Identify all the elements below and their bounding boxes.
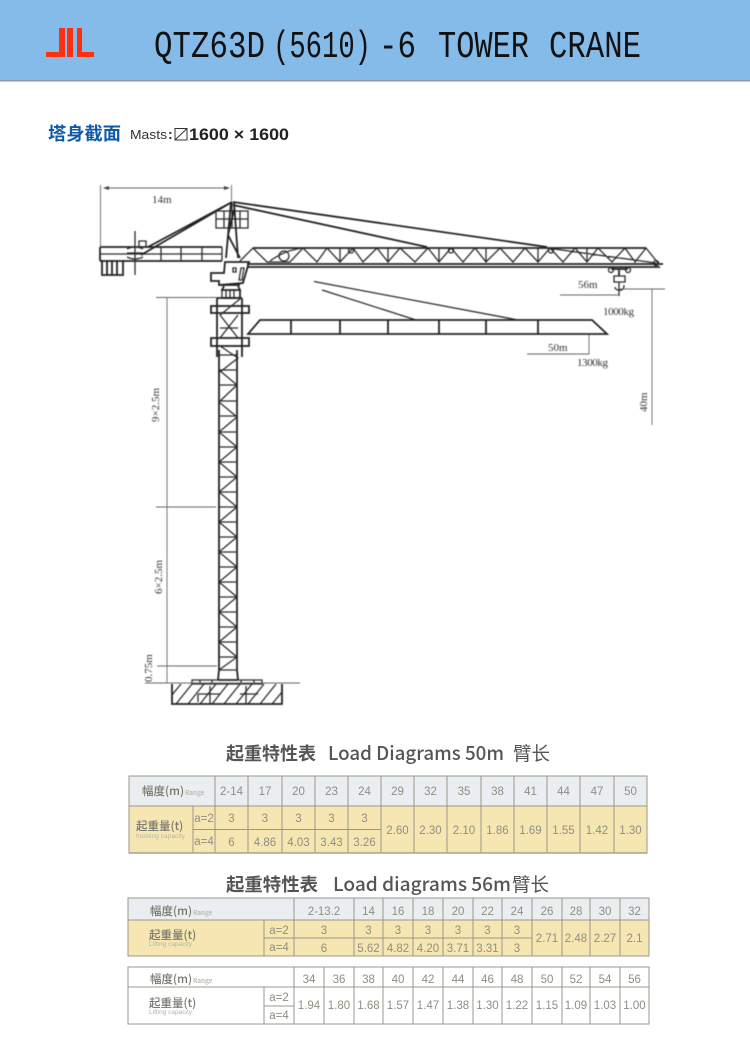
lower capacity values: 1.57 (387, 1000, 409, 1012)
upper capacity values: 3.31 (476, 943, 499, 955)
range values: 17 (259, 786, 271, 798)
row label: hoisting capacity: a=4 (194, 836, 214, 848)
range values: 38 (491, 786, 504, 798)
climbing frame (211, 298, 249, 372)
lower range values: 44 (452, 974, 465, 986)
range values: 32 (424, 786, 437, 798)
dimension: mast heights: 9×2.5m (150, 388, 162, 422)
upper capacity values: 2.1 (626, 933, 642, 945)
mast section heading: 塔身截面 (48, 120, 121, 146)
range values: 2-14 (220, 786, 244, 798)
upper range values: 18 (422, 906, 434, 918)
upper row labels (149, 903, 289, 954)
row label: hoisting capacity: hoisting capacity (136, 833, 186, 840)
upper capacity values: 3 (455, 925, 461, 937)
lower range values (303, 974, 641, 986)
counter jib (100, 231, 222, 275)
upper capacity values: 6 (321, 943, 327, 955)
mast lattice (218, 350, 238, 680)
capacity values: 3.43 (320, 837, 343, 849)
slewing unit and cab (211, 262, 249, 298)
upper row labels: Lifting capacity (149, 941, 193, 948)
lower range values: 34 (303, 974, 316, 986)
table: load diagram 56m jib (128, 898, 649, 1024)
upper range values: 30 (599, 906, 611, 918)
lower range values: 56 (628, 974, 641, 986)
upper capacity values: 3 (395, 925, 401, 937)
capacity values: 2.30 (419, 825, 442, 837)
upper capacity values: 5.62 (357, 943, 380, 955)
jib 50m variant (248, 282, 608, 369)
foundation (172, 680, 282, 704)
table title: 50m: 臂长 (513, 739, 550, 766)
lower range values: 48 (511, 974, 523, 986)
capacity values: 3 (295, 813, 302, 825)
dimension: 56m 1000kg: 1000kg (603, 306, 634, 318)
upper row labels: a=2 (269, 925, 289, 937)
upper range values (308, 906, 641, 918)
upper capacity values: 3 (514, 925, 520, 937)
upper range values: 32 (628, 906, 641, 918)
title: TOWER (438, 26, 529, 69)
capacity values: 1.30 (619, 825, 642, 837)
tower head and tie bars (141, 202, 547, 258)
main jib 56m (240, 248, 663, 267)
table title: 50m (226, 739, 550, 766)
row label: hoisting capacity: a=2 (194, 813, 214, 825)
upper capacity values: 3 (514, 943, 520, 955)
upper range values: 2-13.2 (308, 906, 340, 918)
range values: 50 (624, 786, 637, 798)
table title: 56m: 起重特性表 (226, 871, 318, 897)
capacity values: 2.10 (453, 825, 475, 837)
title: (5610) (273, 26, 371, 69)
mast section heading (48, 120, 289, 146)
capacity values: 1.42 (586, 825, 608, 837)
upper range values: 28 (570, 906, 582, 918)
lower row labels (149, 971, 289, 1022)
range values: 29 (391, 786, 404, 798)
lower capacity values: 1.03 (594, 1000, 616, 1012)
title (154, 26, 641, 69)
table title: 56m: Load diagrams 56m (333, 870, 511, 897)
capacity values: 4.03 (287, 837, 310, 849)
upper range values: 22 (481, 906, 494, 918)
range values (220, 786, 637, 798)
lower capacity values: 1.30 (476, 1000, 499, 1012)
range values: 24 (358, 786, 371, 798)
capacity values: 1.55 (552, 825, 575, 837)
lower capacity values: 1.68 (357, 1000, 380, 1012)
capacity values: 3 (328, 813, 335, 825)
lower range values: 46 (481, 974, 494, 986)
capacity values: 1.86 (486, 825, 509, 837)
row label: hoisting capacity: 起重量(t) (136, 818, 183, 834)
lower row labels: a=4 (269, 1010, 289, 1022)
upper range values: 26 (541, 906, 553, 918)
lower range values: 42 (422, 974, 434, 986)
upper capacity values: 3 (425, 925, 431, 937)
capacity values: 3 (228, 813, 235, 825)
lower capacity values: 1.00 (623, 1000, 646, 1012)
upper capacity values: 4.20 (417, 943, 439, 955)
capacity values: 1.69 (519, 825, 542, 837)
counterweight (102, 260, 123, 275)
table title: 50m: Load Diagrams 50m (328, 739, 504, 766)
range values: 44 (557, 786, 570, 798)
range values: 20 (292, 786, 305, 798)
lower row labels: 幅度(m)Range (150, 971, 213, 987)
lower capacity values: 1.09 (565, 1000, 587, 1012)
lower capacity values (298, 1000, 646, 1012)
lower row labels: 起重量(t) (149, 995, 196, 1011)
lower range values: 36 (333, 974, 345, 986)
dimension: mast heights: 0.75m (143, 654, 155, 682)
upper range values: 14 (362, 906, 375, 918)
lower row labels: a=2 (269, 992, 289, 1004)
upper capacity values: 3.71 (447, 943, 469, 955)
upper capacity values: 2.27 (594, 933, 616, 945)
dimension: 56m 1000kg: 56m (578, 279, 598, 291)
title: CRANE (549, 26, 641, 69)
upper range values: 24 (511, 906, 524, 918)
lower range values: 52 (570, 974, 582, 986)
upper capacity values: 3 (365, 925, 372, 937)
title: -6 (379, 26, 416, 69)
range values: 23 (325, 786, 338, 798)
lower row labels: Lifting capacity (149, 1009, 193, 1016)
lower range values: 38 (362, 974, 375, 986)
table: load diagram 50m jib (129, 776, 647, 853)
upper row labels: 幅度(m)Range (150, 903, 213, 919)
upper range values: 16 (392, 906, 404, 918)
upper capacity values: 3 (484, 925, 491, 937)
capacity values: 3 (262, 813, 268, 825)
lower range values: 54 (599, 974, 612, 986)
lower capacity values: 1.38 (447, 1000, 469, 1012)
upper capacity values (321, 925, 642, 955)
capacity values: 4.86 (254, 837, 276, 849)
mast section heading: : (168, 126, 173, 142)
table title: 56m (226, 870, 549, 897)
capacity values: 2.60 (386, 825, 409, 837)
upper row labels: 起重量(t) (149, 927, 196, 943)
capacity values (228, 813, 642, 849)
dimension: 40m height: 40m (638, 392, 650, 412)
mast section heading: Masts (130, 127, 168, 142)
lower capacity values: 1.15 (536, 1000, 558, 1012)
dimension: mast heights: 6×2.5m (153, 560, 165, 594)
lower capacity values: 1.80 (328, 1000, 350, 1012)
table title: 56m: 臂长 (512, 870, 549, 897)
table title: 50m: 起重特性表 (226, 740, 316, 766)
title: QTZ63D (154, 26, 265, 69)
range values: 41 (524, 786, 537, 798)
jib 50m variant: 1300kg (577, 357, 608, 369)
jib 50m variant: 50m (548, 342, 568, 354)
icon: square section symbol (175, 128, 187, 140)
upper capacity values: 4.82 (387, 943, 409, 955)
header banner (0, 0, 750, 82)
tower crane elevation drawing (100, 185, 665, 704)
capacity values: 3.26 (353, 837, 376, 849)
upper capacity values: 3 (321, 925, 327, 937)
range values: 47 (591, 786, 603, 798)
trolley and hook (608, 268, 630, 296)
upper capacity values: 2.71 (536, 933, 558, 945)
row label: range: 幅度(m)Range (142, 783, 205, 799)
capacity values: 3 (361, 813, 368, 825)
capacity values: 6 (228, 837, 235, 849)
dimension: 56m 1000kg (560, 279, 634, 318)
lower capacity values: 1.94 (298, 1000, 321, 1012)
mast section heading: 1600 × 1600 (189, 125, 289, 144)
lower capacity values: 1.47 (417, 1000, 439, 1012)
dimension: mast heights (143, 298, 300, 683)
icon: JIL logo (46, 28, 94, 57)
range values: 35 (458, 786, 470, 798)
row label: hoisting capacity (136, 813, 214, 848)
upper row labels: a=4 (269, 942, 289, 954)
lower range values: 40 (392, 974, 404, 986)
upper range values: 20 (452, 906, 464, 918)
upper capacity values: 2.48 (565, 933, 587, 945)
dimension: 14m (100, 185, 232, 247)
dimension: 14m: 14m (152, 194, 172, 206)
lower range values: 50 (541, 974, 553, 986)
lower capacity values: 1.22 (506, 1000, 528, 1012)
dimension: 40m height (620, 289, 665, 425)
